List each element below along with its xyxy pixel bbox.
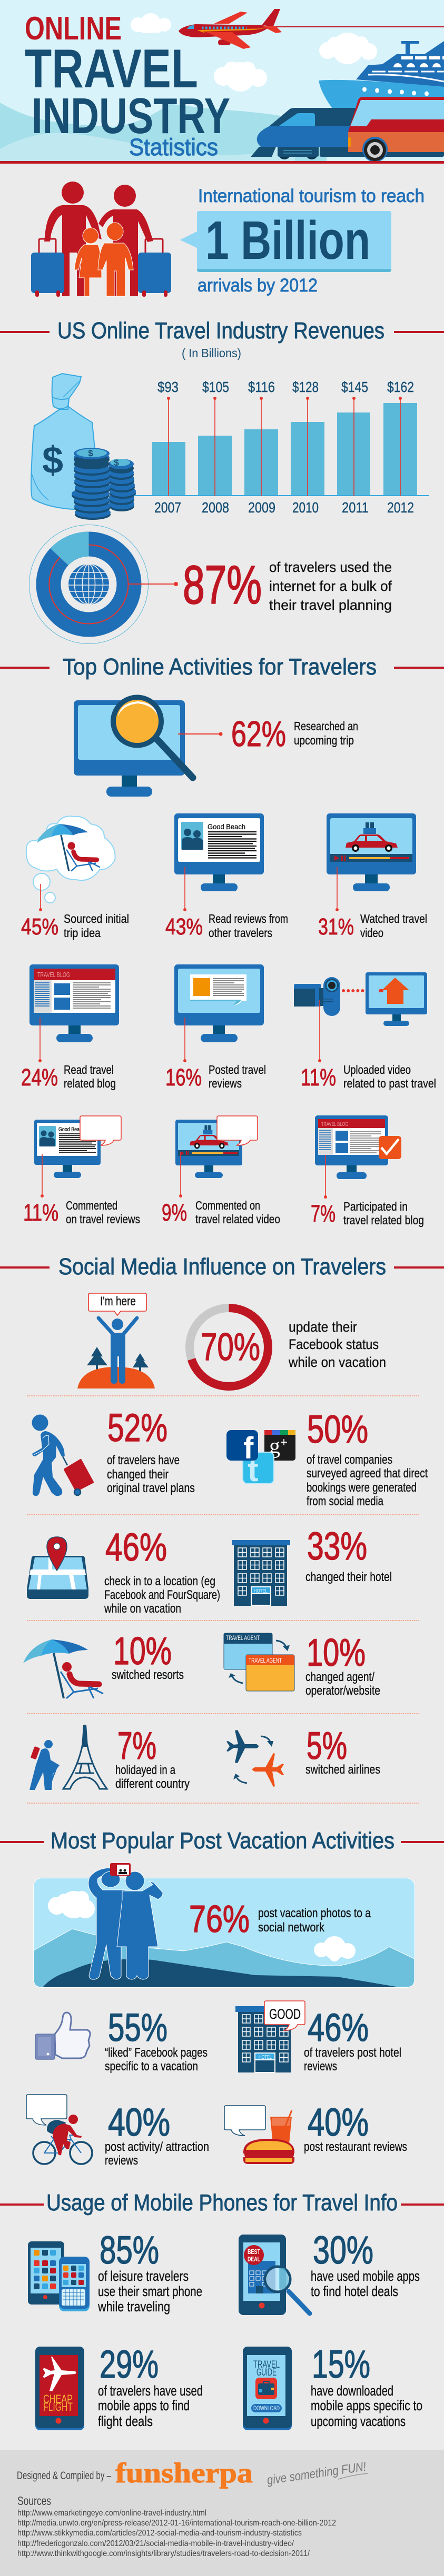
heading: revenues: ( In Billions) xyxy=(182,346,241,360)
stat: 76 percent xyxy=(189,1898,371,1940)
stat: 7 percent participated in blog xyxy=(311,1115,424,1227)
stat: 11 percent uploaded video: Uploaded video xyxy=(343,1063,411,1076)
text: sources: http://www.stikkymedia.com/articles/2012-social-media-and-tourism-industry-statistics xyxy=(17,2529,302,2538)
icon: social network logos: t xyxy=(248,1452,259,1488)
stat: 62 percent researched: upcoming trip xyxy=(294,733,354,747)
stat: 29 percent flight deals: flight deals xyxy=(98,2413,153,2429)
stat: 45 percent sourced trip idea: 45% xyxy=(21,914,58,940)
stat: 46 percent post hotel reviews: reviews xyxy=(304,2059,337,2074)
stat: 7 percent different country: different country xyxy=(115,1777,190,1791)
stat: 30 percent hotel deals xyxy=(239,2228,420,2315)
icon: hotel building: HOTEL xyxy=(254,1588,268,1594)
stat: 43 percent read reviews: Read reviews from xyxy=(209,912,288,925)
text: sources: Sources xyxy=(17,2494,51,2508)
stat: 16 percent posted reviews xyxy=(165,964,266,1091)
heading: post vacation activities: Most Popular Post Vacation Activities xyxy=(51,1828,394,1854)
icon: thumbs up xyxy=(35,2012,90,2059)
bar chart: revenues: 2007 xyxy=(154,499,181,516)
stat: 85 percent smart phone: while traveling xyxy=(97,2299,170,2315)
bar chart: revenues: $116 xyxy=(248,379,275,395)
stat: 55 percent liked pages: “liked” Facebook pages xyxy=(105,2046,208,2060)
icon: cyclist with speech bubble xyxy=(26,2095,92,2164)
text: arrivals by 2012: arrivals by 2012 xyxy=(198,275,318,296)
icon: phone with cheap flight: FLIGHT xyxy=(43,2400,73,2413)
icon: monitor with magnifier xyxy=(74,695,193,797)
icon: burger and drink with speech bubble xyxy=(224,2106,294,2164)
tagline: give something fun: give something FUN! xyxy=(266,2460,367,2488)
stat: 46 percent check in: Facebook and FourSquare) xyxy=(104,1588,220,1602)
title: ONLINE xyxy=(25,11,122,47)
text: update facebook status: Facebook status xyxy=(289,1336,379,1352)
stat: 31 percent watched video: Watched travel xyxy=(360,912,427,925)
icon: phone with travel guide: GUIDE xyxy=(256,2367,277,2378)
stat: 40 percent activity reviews: reviews xyxy=(105,2154,138,2168)
icon: phone with best deal and magnifier xyxy=(239,2235,310,2315)
bar chart: revenues: 2009 xyxy=(248,499,275,516)
stat: 7 percent participated in blog: travel related blog xyxy=(343,1213,424,1227)
stat: 55 percent liked pages xyxy=(35,2006,208,2074)
chart: 87 percent donut xyxy=(29,525,178,644)
icon: airplane with trail xyxy=(179,9,444,49)
stat: 40 percent restaurant reviews: post restaurant reviews xyxy=(304,2140,407,2154)
stat: 87 percent: internet for a bulk of xyxy=(269,578,392,594)
text: update facebook status: update their xyxy=(289,1319,357,1335)
stat: 5 percent switched airlines: switched airlines xyxy=(305,1763,380,1777)
stat: 87 percent: of travelers used the xyxy=(269,559,392,575)
stat: 5 percent switched airlines xyxy=(226,1725,380,1787)
stat: 29 percent flight deals: 29% xyxy=(100,2342,159,2386)
icon: person on hill with I'm here bubble xyxy=(77,1293,155,1388)
stat: 85 percent smart phone: of leisure travelers xyxy=(98,2268,189,2284)
stat: 55 percent liked pages: specific to a vacation xyxy=(105,2059,198,2074)
icon: two planes swapping xyxy=(226,1730,284,1787)
stat: 46 percent post hotel reviews: of travelers post hotel xyxy=(304,2046,401,2060)
stat: 52 percent changed plans: changed their xyxy=(107,1467,169,1482)
stat: 7 percent different country xyxy=(29,1725,190,1791)
stat: 87 percent: their travel planning xyxy=(269,597,392,613)
stat: 62 percent researched xyxy=(74,695,358,797)
stat: 50 percent social media bookings xyxy=(226,1407,428,1508)
stat: 46 percent check in: while on vacation xyxy=(104,1602,181,1616)
stat: 55 percent liked pages: 55% xyxy=(108,2006,167,2049)
stat: 11 percent uploaded video xyxy=(294,972,436,1091)
icon: travel agent windows xyxy=(224,1633,294,1691)
title: Statistics xyxy=(129,134,218,160)
stat: 11 percent commented on reviews xyxy=(23,1116,140,1226)
icon: money bag and coins: $ xyxy=(42,439,63,481)
bar chart: revenues: $162 xyxy=(387,379,414,395)
icon: person on hill with I'm here bubble: I'm here xyxy=(100,1294,136,1309)
stat: 7 percent participated in blog: Participated in xyxy=(343,1200,408,1213)
bar chart: revenues xyxy=(134,379,429,516)
stat: 40 percent restaurant reviews: 40% xyxy=(308,2100,369,2144)
stat: 33 percent changed hotel: changed their hotel xyxy=(305,1570,392,1584)
icon: money bag and coins: $ xyxy=(88,448,93,458)
heading: revenues xyxy=(0,318,444,360)
stat: 24 percent read blog: related blog xyxy=(64,1076,116,1090)
stat: 45 percent sourced trip idea xyxy=(21,816,129,940)
bar chart: revenues: 2008 xyxy=(202,499,229,516)
icon: social network logos: g xyxy=(269,1434,280,1458)
stat: 85 percent smart phone xyxy=(28,2228,202,2315)
stat: 43 percent read reviews: other travelers xyxy=(209,926,272,940)
icon: hiker and eiffel tower xyxy=(29,1725,107,1790)
stat: 52 percent changed plans: of travelers have xyxy=(107,1453,180,1467)
chart: 70 percent ring xyxy=(190,1308,268,1386)
icon: hotel with good review bubble: HOTEL xyxy=(259,2055,272,2060)
text: update facebook status xyxy=(288,1319,386,1370)
logo: funsherpa: funsherpa xyxy=(115,2457,253,2489)
stat: 31 percent watched video: 31% xyxy=(318,914,354,940)
stat: 10 percent switched resorts: 10% xyxy=(113,1630,172,1673)
stat: 15 percent travel guide apps: have downloaded xyxy=(311,2383,393,2399)
stat: 46 percent check in: 46% xyxy=(105,1525,167,1569)
stat: 85 percent smart phone: use their smart phone xyxy=(98,2283,202,2299)
stat: 76 percent: post vacation photos to a xyxy=(258,1906,371,1920)
stat: 40 percent restaurant reviews xyxy=(224,2100,407,2164)
callout: 1 Billion: 1 Billion xyxy=(205,210,370,270)
icon: monitor with comment xyxy=(34,1116,121,1178)
stat: 46 percent check in: check in to a location (eg xyxy=(104,1574,215,1588)
icon: thought bubble with beach scene xyxy=(26,816,115,903)
stat: 87 percent: 87% xyxy=(183,555,262,615)
stat: 11 percent commented on reviews: Commented xyxy=(66,1199,117,1212)
stat: 11 percent commented on reviews: 11% xyxy=(23,1199,58,1226)
stat: 10 percent changed agent: changed agent/ xyxy=(305,1670,374,1684)
text: sources: http://www.thinkwithgoogle.com/insights/library/studies/travelers-road-to-decision-2011/ xyxy=(17,2549,310,2558)
icon: monitor with blog and check xyxy=(315,1115,401,1179)
icon: money bag and coins: $ xyxy=(114,458,119,468)
stat: 50 percent social media bookings: of travel companies xyxy=(307,1453,392,1467)
bar chart: revenues: $105 xyxy=(202,379,229,395)
stat: 15 percent travel guide apps: 15% xyxy=(312,2342,370,2386)
icon: phone with travel guide xyxy=(243,2347,292,2430)
stat: 43 percent read reviews: 43% xyxy=(165,914,203,940)
icon: phone with cheap flight: CHEAP xyxy=(43,2392,73,2406)
stat: 52 percent changed plans xyxy=(32,1406,195,1496)
icon: traveler with suitcase xyxy=(32,1414,93,1496)
panel: international tourism xyxy=(31,182,425,297)
panel: footer xyxy=(0,2450,444,2576)
text: update facebook status: while on vacation xyxy=(288,1354,386,1370)
stat: 15 percent travel guide apps: upcoming vacations xyxy=(311,2413,406,2429)
icon: monitor with blog and check: TRAVEL BLOG xyxy=(321,1121,348,1128)
icon: monitor with video and comment xyxy=(175,1116,258,1178)
icon: two smart phones xyxy=(28,2241,90,2311)
icon: monitor with travel video xyxy=(327,813,416,891)
title: INDUSTRY xyxy=(32,88,230,144)
stat: 16 percent posted reviews: reviews xyxy=(209,1076,242,1090)
bar chart: revenues: 2011 xyxy=(342,499,369,516)
stat: 33 percent changed hotel xyxy=(232,1524,392,1606)
stat: 29 percent flight deals: mobile apps to find xyxy=(98,2398,190,2413)
stat: 62 percent researched: 62% xyxy=(231,714,286,754)
panel: post vacation photos xyxy=(34,1863,415,1988)
icon: phone with travel guide: TRAVEL xyxy=(253,2359,280,2370)
heading: top online activities: Top Online Activities for Travelers xyxy=(63,654,377,680)
icon: camera uploading to monitor xyxy=(294,972,427,1026)
panel: header xyxy=(0,0,444,164)
icon: bus xyxy=(348,97,444,162)
heading: revenues: US Online Travel Industry Revenues xyxy=(57,318,384,344)
bar chart: revenues: $93 xyxy=(157,379,179,395)
icon: travel agent windows: TRAVEL AGENT xyxy=(249,1657,282,1664)
icon: phone with travel guide: DOWNLOAD xyxy=(253,2404,280,2412)
stat: 7 percent different country: holidayed in a xyxy=(115,1763,175,1777)
icon: cruise ship xyxy=(319,41,444,126)
title xyxy=(25,11,230,160)
stat: 30 percent hotel deals: 30% xyxy=(313,2228,373,2272)
icon: social network logos: + xyxy=(280,1435,288,1450)
stat: 5 percent switched airlines: 5% xyxy=(307,1725,347,1767)
icon: camera phone xyxy=(110,1863,131,1876)
icon: train xyxy=(251,108,444,159)
text: sources xyxy=(17,2494,336,2558)
stat: 9 percent commented on video: 9% xyxy=(162,1199,187,1226)
text: sources: http://media.unwto.org/en/press-release/2012-01-16/international-tourism-reach-one-billion-2012 xyxy=(17,2519,336,2528)
stat: 29 percent flight deals: of travelers have used xyxy=(98,2383,203,2399)
bar chart: revenues: 2010 xyxy=(292,499,319,516)
heading: mobile phones: Usage of Mobile Phones for Travel Info xyxy=(46,2190,398,2216)
bar chart: revenues: $128 xyxy=(292,379,319,395)
stat: 40 percent activity reviews: post activity/ attraction xyxy=(105,2140,209,2154)
stat: 45 percent sourced trip idea: trip idea xyxy=(64,926,101,940)
stat: 31 percent watched video: video xyxy=(360,926,383,940)
icon: clouds xyxy=(131,13,377,92)
stat: 87 percent xyxy=(183,555,392,615)
credit: designed by: Designed & Compiled by – xyxy=(17,2470,111,2482)
icon: phone with best deal and magnifier: BEST xyxy=(248,2248,260,2256)
icon: monitor with review: Good Beach xyxy=(208,822,245,831)
icon: globe xyxy=(68,564,109,605)
icon: monitor with posted review xyxy=(174,964,264,1042)
icon: monitor with review xyxy=(174,813,264,891)
stat: 46 percent post hotel reviews xyxy=(235,2001,401,2074)
chart: 70 percent ring: 70% xyxy=(201,1326,260,1368)
text: sources: http://www.emarketingeye.com/online-travel-industry.html xyxy=(17,2509,206,2518)
icon: beach umbrella and lounger xyxy=(23,1639,103,1698)
stat: 62 percent researched: Researched an xyxy=(294,719,358,733)
text: sources: http://fredericgonzalo.com/2012/03/21/social-media-mobile-in-travel-industry-video/ xyxy=(17,2539,294,2548)
bar chart: revenues: 2012 xyxy=(387,499,414,516)
stat: 16 percent posted reviews: 16% xyxy=(165,1064,202,1091)
stat: 50 percent social media bookings: from social media xyxy=(307,1494,383,1508)
stat: 24 percent read blog xyxy=(21,964,119,1091)
stat: 15 percent travel guide apps xyxy=(243,2342,422,2430)
icon: hotel with good review bubble xyxy=(235,2001,305,2072)
text: international tourism to reach: International tourism to reach xyxy=(198,186,425,206)
icon: phone with cheap flight xyxy=(35,2347,84,2430)
stat: 43 percent read reviews xyxy=(165,813,288,940)
stat: 85 percent smart phone: 85% xyxy=(100,2228,159,2272)
icon: travel agent windows: TRAVEL AGENT xyxy=(226,1634,260,1642)
stat: 24 percent read blog: 24% xyxy=(21,1064,58,1091)
stat: 46 percent post hotel reviews: 46% xyxy=(308,2006,369,2049)
stat: 40 percent activity reviews: 40% xyxy=(108,2100,170,2144)
stat: 10 percent changed agent: 10% xyxy=(307,1632,366,1674)
stat: 16 percent posted reviews: Posted travel xyxy=(209,1063,266,1076)
icon: couple taking a photo xyxy=(88,1868,163,1979)
stat: 7 percent different country: 7% xyxy=(117,1725,156,1767)
icon: phone with best deal and magnifier: DEAL xyxy=(248,2255,260,2263)
stat: 52 percent changed plans: 52% xyxy=(107,1406,167,1450)
icon: monitor with comment: Good Bea xyxy=(58,1126,80,1133)
stat: 10 percent changed agent: operator/website xyxy=(305,1684,380,1698)
bar chart: revenues: $145 xyxy=(341,379,368,395)
stat: 31 percent watched video xyxy=(318,813,427,940)
stat: 45 percent sourced trip idea: Sourced initial xyxy=(64,912,129,925)
stat: 10 percent changed agent xyxy=(224,1632,380,1698)
stat: 76 percent: 76% xyxy=(189,1898,250,1940)
stat: 10 percent switched resorts: switched resorts xyxy=(112,1668,184,1682)
icon: money bag and coins xyxy=(31,374,136,520)
icon: social network logos xyxy=(226,1430,295,1488)
stat: 30 percent hotel deals: to find hotel deals xyxy=(311,2283,398,2299)
stat: 76 percent: social network xyxy=(258,1920,325,1935)
icon: monitor with travel blog xyxy=(29,964,119,1042)
stat: 33 percent changed hotel: 33% xyxy=(307,1524,367,1568)
stat: 9 percent commented on video xyxy=(162,1116,280,1226)
stat: 7 percent participated in blog: 7% xyxy=(311,1200,336,1227)
stat: 24 percent read blog: Read travel xyxy=(64,1063,114,1076)
stat: 9 percent commented on video: travel related video xyxy=(195,1212,280,1226)
stat: 52 percent changed plans: original travel plans xyxy=(107,1481,195,1495)
icon: monitor with travel blog: TRAVEL BLOG xyxy=(37,971,70,979)
stat: 46 percent check in xyxy=(27,1525,220,1616)
stat: 10 percent switched resorts xyxy=(23,1630,184,1698)
icon: hotel with good review bubble: GOOD xyxy=(269,2006,301,2022)
stat: 40 percent activity reviews xyxy=(26,2095,209,2168)
icon: family with suitcases xyxy=(31,182,171,297)
stat: 9 percent commented on video: Commented on xyxy=(195,1199,260,1212)
icon: hotel building xyxy=(232,1540,290,1606)
stat: 50 percent social media bookings: 50% xyxy=(307,1407,368,1451)
stat: 11 percent commented on reviews: on travel reviews xyxy=(66,1212,140,1226)
icon: social network logos: f xyxy=(243,1431,254,1465)
icon: map pin xyxy=(27,1537,88,1599)
stat: 11 percent uploaded video: 11% xyxy=(301,1064,336,1091)
stat: 29 percent flight deals xyxy=(35,2342,203,2430)
title: TRAVEL xyxy=(25,38,198,99)
heading: social media influence: Social Media Influence on Travelers xyxy=(58,1254,386,1280)
